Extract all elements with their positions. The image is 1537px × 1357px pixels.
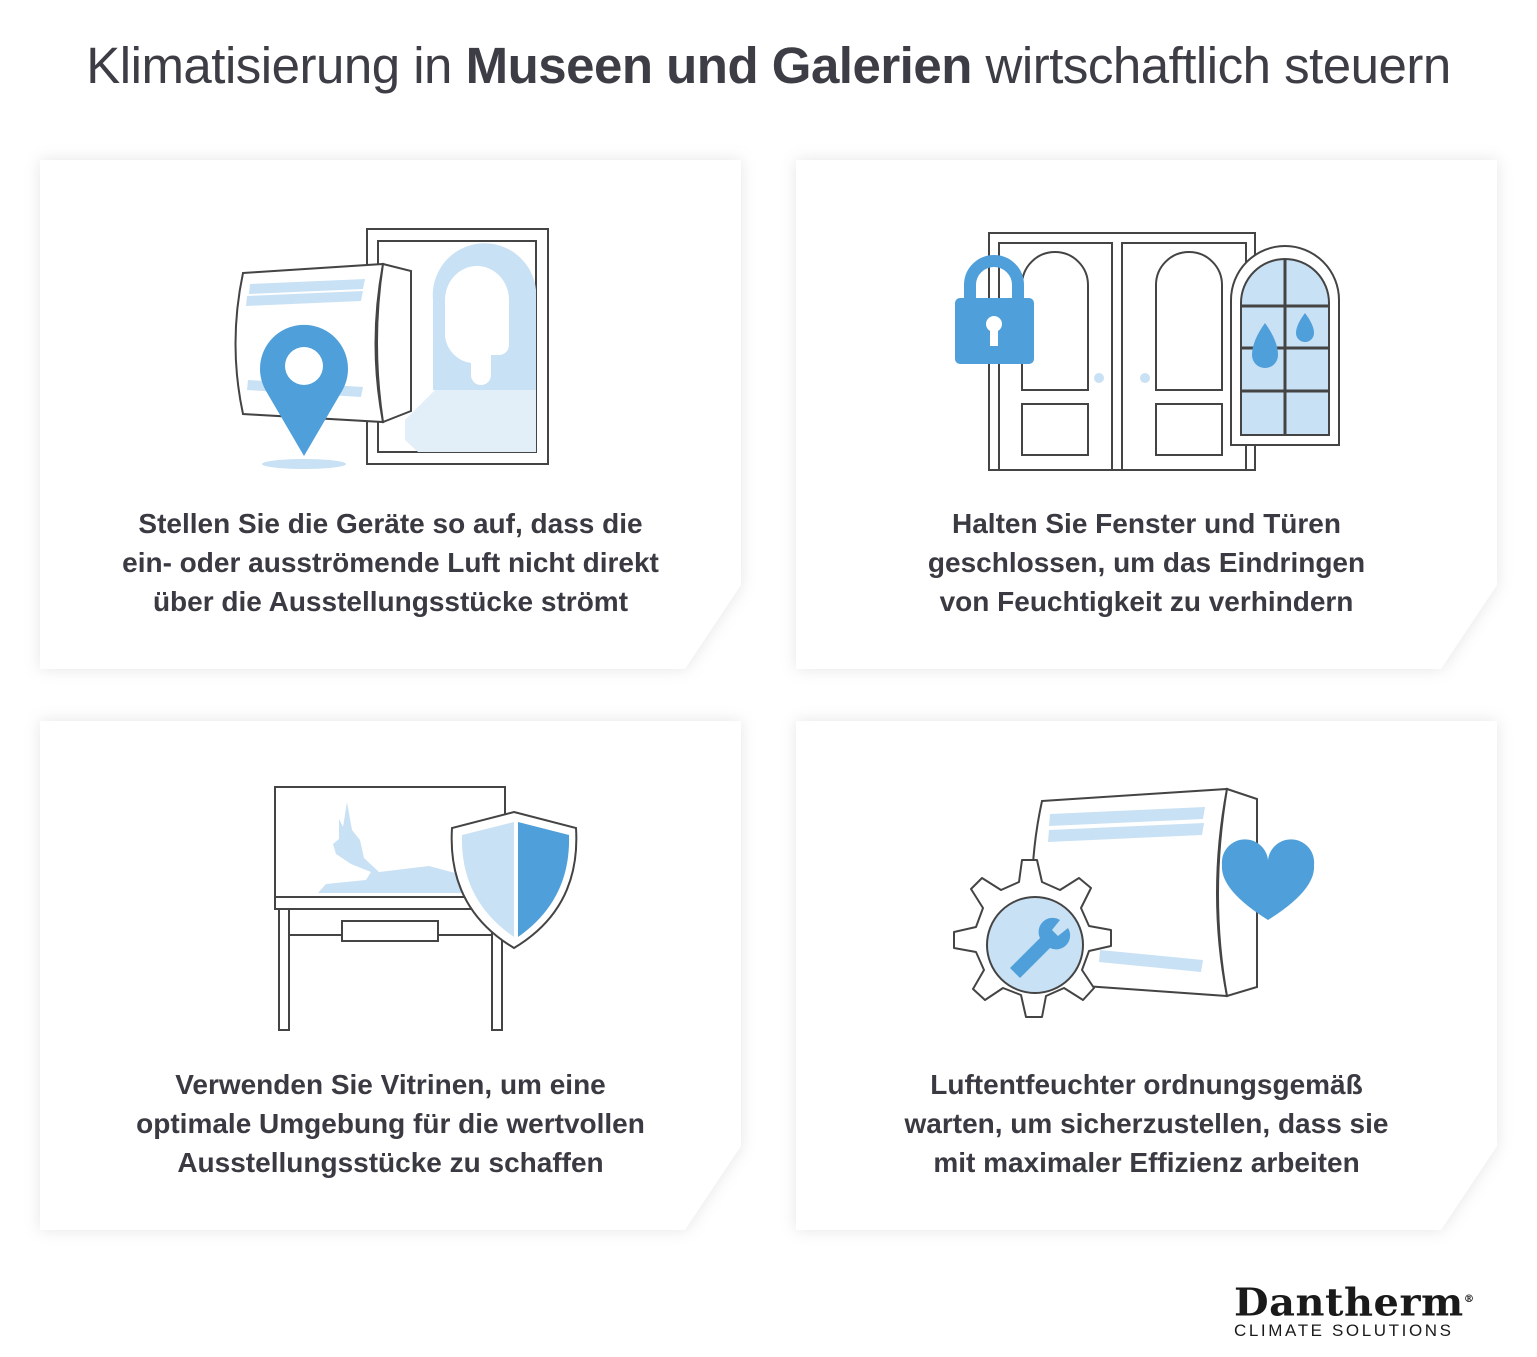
logo: CLIMATE SOLUTIONS <box>1234 1321 1454 1340</box>
icon: display case with shield <box>274 786 578 1031</box>
text: Verwenden Sie Vitrinen, um eine <box>175 1069 606 1100</box>
text: mit maximaler Effizienz arbeiten <box>933 1147 1360 1178</box>
icon: dehumidifier, gear, heart <box>953 788 1314 1018</box>
logo: Dantherm® <box>1234 1280 1475 1325</box>
text: optimale Umgebung für die wertvollen <box>136 1108 645 1139</box>
panel: display cases <box>36 718 744 1234</box>
text <box>122 508 659 617</box>
text: Ausstellungsstücke zu schaffen <box>177 1147 604 1178</box>
text: ein- oder ausströmende Luft nicht direkt <box>122 547 659 578</box>
text: geschlossen, um das Eindringen <box>928 547 1365 578</box>
text: von Feuchtigkeit zu verhindern <box>940 586 1353 617</box>
text <box>136 1069 645 1178</box>
title: Klimatisierung in Museen und Galerien wirtschaftlich steuern <box>86 37 1451 94</box>
panel: doors and windows <box>792 156 1500 672</box>
icon: AC unit and painting <box>234 228 549 469</box>
icon: doors, window, lock <box>955 232 1340 471</box>
text: warten, um sicherzustellen, dass sie <box>904 1108 1388 1139</box>
panel: maintenance <box>792 718 1500 1234</box>
text: Halten Sie Fenster und Türen <box>952 508 1341 539</box>
text: über die Ausstellungsstücke strömt <box>153 586 628 617</box>
text: Luftentfeuchter ordnungsgemäß <box>930 1069 1363 1100</box>
panel: device placement <box>36 156 744 672</box>
text <box>928 508 1365 617</box>
text <box>904 1069 1388 1178</box>
text: Stellen Sie die Geräte so auf, dass die <box>138 508 643 539</box>
